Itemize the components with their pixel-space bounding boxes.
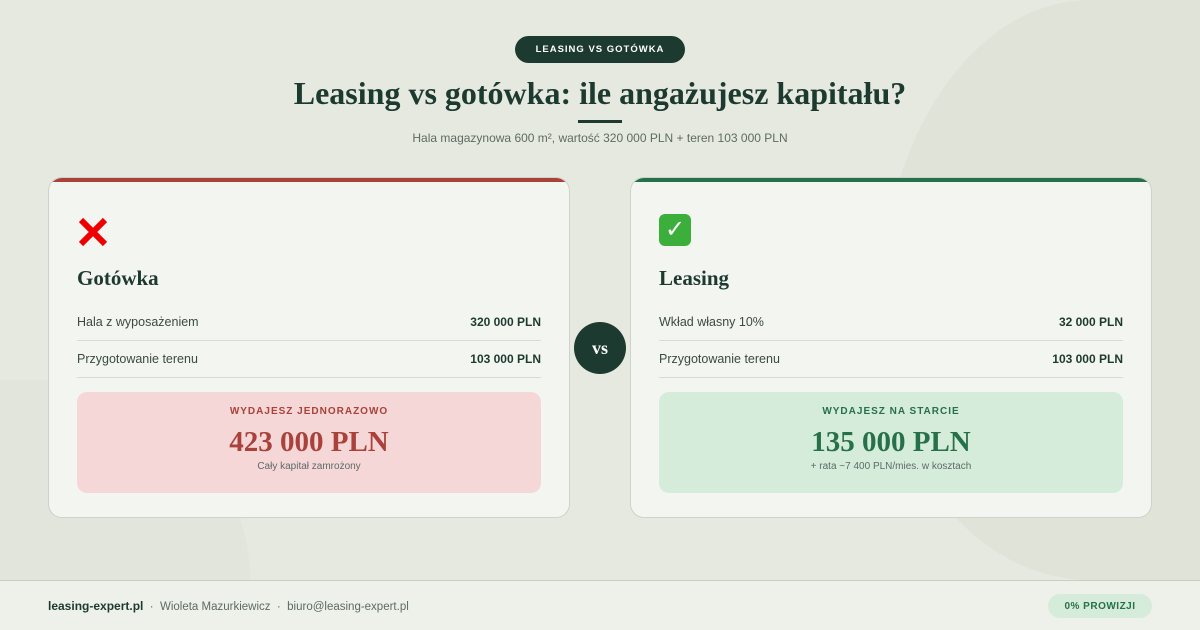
panel: cash (48, 177, 570, 518)
callout leasing: WYDAJESZ NA STARCIE (822, 406, 960, 417)
panel: leasing: Wkład własny 10% (659, 315, 764, 329)
badge: commission (1048, 594, 1152, 618)
panel: cash: Hala z wyposażeniem (77, 315, 199, 329)
callout cash: 423 000 PLN (229, 426, 389, 458)
subtitle: Hala magazynowa 600 m², wartość 320 000 PLN + teren 103 000 PLN (412, 131, 788, 145)
footer: leasing-expert.pl · Wioleta Mazurkiewicz · biuro@leasing-expert.pl (48, 599, 409, 613)
panel: leasing: Przygotowanie terenu (659, 352, 780, 366)
footer (0, 580, 1200, 630)
vs circle (574, 322, 626, 374)
vs circle: vs (592, 338, 608, 358)
badge: LEASING VS GOTÓWKA (536, 44, 664, 55)
badge: commission: 0% PROWIZJI (1064, 601, 1136, 612)
callout leasing: 135 000 PLN (811, 426, 971, 458)
heading cash: Gotówka (77, 266, 159, 290)
heading leasing: Leasing (659, 266, 729, 290)
callout cash: WYDAJESZ JEDNORAZOWO (230, 406, 388, 417)
panel: leasing: 32 000 PLN (1059, 315, 1123, 329)
callout cash (77, 392, 541, 493)
badge (515, 36, 685, 63)
panel: leasing: 103 000 PLN (1052, 352, 1123, 366)
panel: cash: Przygotowanie terenu (77, 352, 198, 366)
icon: check: ✓ (665, 216, 685, 243)
icon: check (659, 214, 691, 246)
callout leasing: + rata ~7 400 PLN/mies. w kosztach (811, 461, 971, 472)
panel: cash: 103 000 PLN (470, 352, 541, 366)
icon: cross (78, 218, 108, 246)
title: Leasing vs gotówka: ile angażujesz kapitału? (294, 75, 906, 111)
callout leasing (659, 392, 1123, 493)
panel: cash: 320 000 PLN (470, 315, 541, 329)
callout cash: Cały kapitał zamrożony (257, 461, 361, 472)
panel: leasing (630, 177, 1152, 518)
